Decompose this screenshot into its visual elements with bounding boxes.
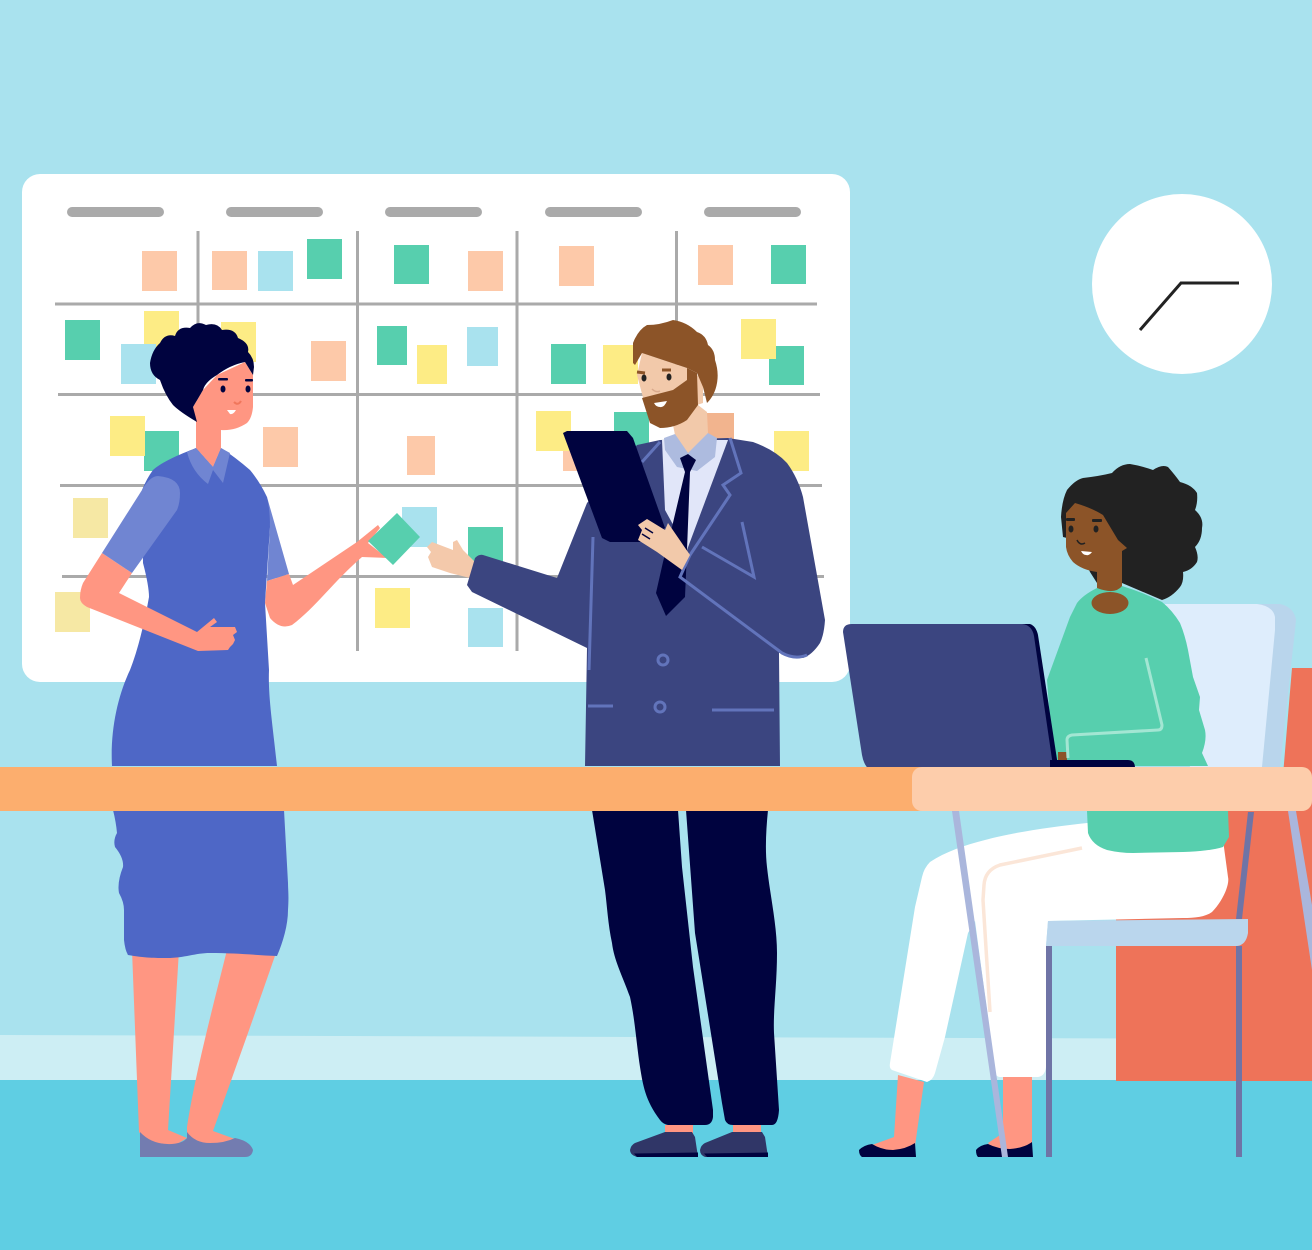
shoes (859, 1142, 1033, 1157)
shoes (630, 1132, 768, 1157)
yellow sticky notes (55, 311, 809, 632)
dress lower (113, 810, 288, 958)
legs (132, 950, 187, 1147)
woman in blue dress (80, 323, 420, 1157)
chair back (1165, 604, 1296, 767)
man in suit (427, 320, 825, 1157)
smile (227, 410, 236, 414)
smile (1081, 551, 1092, 555)
dress torso (112, 448, 277, 766)
wall clock (1092, 194, 1272, 374)
laptop (843, 624, 1135, 770)
back sleeve (267, 497, 289, 581)
far arm reaching to card (265, 525, 387, 626)
nose (1077, 540, 1085, 544)
trousers right leg (686, 810, 779, 1125)
neck (1097, 545, 1122, 600)
sweater lower (1087, 811, 1229, 853)
face (1066, 503, 1127, 580)
ear (697, 375, 703, 405)
collar (187, 448, 230, 484)
hand on tablet (638, 519, 690, 570)
table legs (952, 811, 1312, 1157)
white trousers (890, 823, 1228, 1082)
hair (1061, 464, 1202, 600)
shoe soles (634, 1152, 768, 1157)
green card (368, 513, 420, 565)
facial features (218, 378, 253, 392)
board grid (55, 231, 824, 651)
suit seams and lapels (588, 438, 807, 710)
neck base (1092, 592, 1128, 614)
face (637, 353, 700, 420)
floor (0, 1080, 1312, 1250)
orange cabinet (1116, 668, 1312, 1081)
trouser fold (983, 848, 1082, 1012)
table near end (912, 767, 1312, 811)
skirting band (0, 1035, 1312, 1082)
chair seat and frame (1046, 812, 1254, 1157)
near arm and hand on waist (80, 553, 237, 651)
fingers lines (642, 528, 653, 539)
sweater upper (1047, 586, 1208, 766)
shirt (662, 440, 728, 550)
bare legs (872, 1075, 1032, 1152)
necktie (656, 454, 696, 616)
clock hands (1140, 283, 1239, 330)
pointing hand (427, 540, 475, 578)
nose (652, 389, 660, 392)
suit jacket and arm (467, 438, 825, 766)
hair (150, 323, 254, 422)
eyes and brows (1066, 518, 1102, 532)
shoes (140, 1132, 253, 1157)
peach sticky notes (142, 245, 734, 475)
table (0, 767, 1312, 811)
beard (642, 368, 698, 428)
trousers left leg (592, 810, 713, 1125)
nose (234, 401, 241, 404)
shirt collar (664, 433, 717, 471)
planning board (22, 174, 850, 682)
seated woman (859, 464, 1296, 1157)
green sticky notes (65, 239, 806, 567)
eyes and brows (642, 374, 672, 382)
neck and face (193, 362, 253, 467)
neck (673, 405, 708, 455)
blue sticky notes (121, 251, 503, 647)
hair (633, 320, 718, 403)
smile (654, 401, 667, 407)
ankles (665, 1125, 761, 1134)
hand (1058, 752, 1067, 762)
jacket buttons (655, 655, 668, 712)
board column headers (67, 207, 801, 217)
sweater fold line (1067, 658, 1162, 758)
sleeve (102, 476, 180, 573)
tablet (563, 431, 665, 542)
